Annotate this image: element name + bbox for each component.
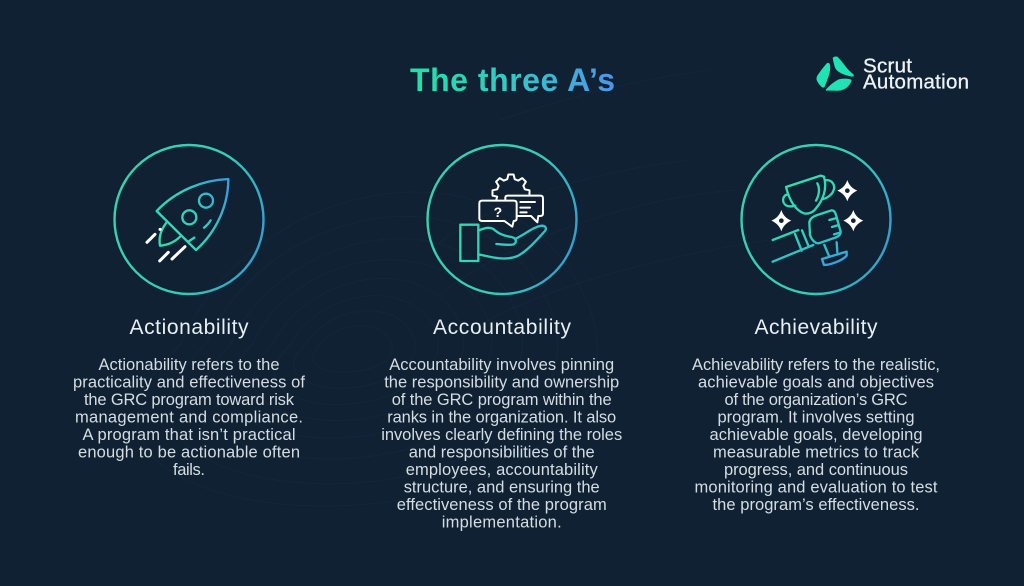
body text: effectiveness of the program bbox=[397, 496, 607, 514]
sparkles bbox=[771, 180, 863, 231]
logo mark bbox=[816, 56, 854, 91]
body text: fails. bbox=[173, 461, 205, 479]
icon ring bbox=[428, 145, 576, 294]
body text: program. It involves setting bbox=[718, 408, 914, 426]
body text: of the GRC program within the bbox=[392, 391, 612, 409]
body text: practicality and effectiveness of bbox=[73, 374, 305, 392]
body text bbox=[692, 356, 940, 514]
panel: Accountability bbox=[381, 145, 622, 532]
logo wordmark: Scrut bbox=[863, 54, 912, 78]
body text: Accountability involves pinning bbox=[389, 356, 614, 374]
body text: employees, accountability bbox=[406, 461, 598, 479]
body text bbox=[73, 356, 305, 479]
heading: Accountability bbox=[433, 316, 572, 339]
icon ring bbox=[114, 145, 264, 294]
body text: the responsibility and ownership bbox=[384, 374, 619, 392]
icon: hand with gear and speech bubbles bbox=[460, 174, 546, 261]
body text: Actionability refers to the bbox=[98, 356, 280, 374]
body text: management and compliance. bbox=[75, 408, 303, 426]
title: The three A’s bbox=[410, 62, 615, 98]
body text: A program that isn’t practical bbox=[82, 426, 296, 444]
heading: Achievability bbox=[754, 316, 878, 339]
icon: hand holding trophy bbox=[771, 176, 863, 265]
body text: achievable goals and objectives bbox=[698, 374, 934, 392]
body text: Achievability refers to the realistic, bbox=[692, 356, 940, 374]
body text: and responsibilities of the bbox=[409, 444, 595, 462]
body text: of the organization’s GRC bbox=[724, 391, 908, 409]
body text: structure, and ensuring the bbox=[404, 478, 600, 496]
body text: the program’s effectiveness. bbox=[712, 496, 920, 514]
body text: monitoring and evaluation to test bbox=[694, 478, 938, 496]
panel: Achievability bbox=[692, 145, 940, 514]
body text: progress, and continuous bbox=[724, 461, 908, 479]
body text bbox=[381, 356, 622, 532]
body text: measurable metrics to track bbox=[713, 444, 920, 462]
body text: ranks in the organization. It also bbox=[387, 408, 616, 426]
heading: Actionability bbox=[130, 316, 249, 339]
panel: Actionability bbox=[73, 145, 305, 479]
body text: enough to be actionable often bbox=[78, 444, 300, 462]
logo: Scrut Automation bbox=[816, 54, 969, 94]
logo: Scrut Automation: Automation bbox=[863, 70, 969, 94]
body text: the GRC program toward risk bbox=[84, 391, 295, 409]
icon ring bbox=[742, 145, 890, 294]
body text: implementation. bbox=[442, 514, 562, 532]
icon: rocket bbox=[147, 179, 228, 261]
question mark: ? bbox=[494, 204, 502, 220]
body text: achievable goals, developing bbox=[710, 426, 922, 444]
body text: involves clearly defining the roles bbox=[381, 426, 622, 444]
